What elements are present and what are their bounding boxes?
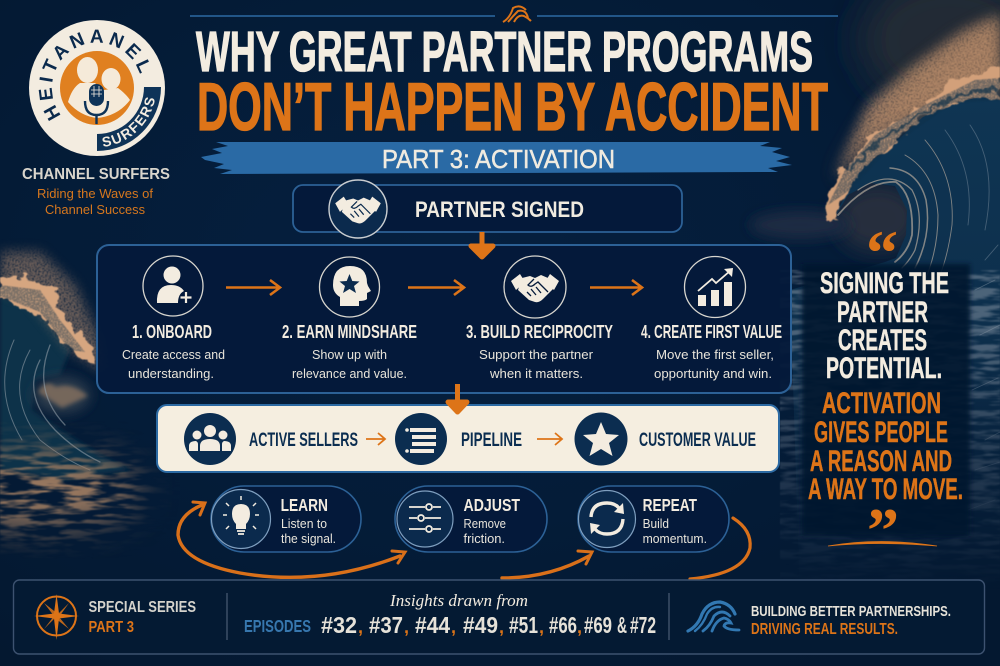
episode numbers: #44 <box>415 612 450 638</box>
step 2: earn mindshare: relevance and value. <box>292 366 407 381</box>
episode numbers: #32 <box>321 612 357 638</box>
footer bar <box>14 580 984 654</box>
step 2: earn mindshare: Show up with <box>312 347 387 362</box>
icon: handshake <box>335 197 381 223</box>
pill: repeat <box>578 486 729 552</box>
logo: channel surfers badge: SURFERS <box>102 98 154 146</box>
tagline: BUILDING BETTER PARTNERSHIPS. <box>751 604 951 620</box>
icon: small orange wave <box>503 6 531 22</box>
step 4: create first value: 4. CREATE FIRST VALUE <box>641 322 782 342</box>
quote underline flourish <box>828 542 937 546</box>
quote panel backing and text <box>802 217 970 566</box>
step 2: earn mindshare <box>282 257 417 381</box>
step 3: build reciprocity: Support the partner <box>479 347 594 362</box>
arrow: repeat loop return <box>690 518 750 579</box>
episode numbers: #51 <box>509 612 538 638</box>
logo caption: Channel Success <box>45 203 145 217</box>
panel: four activation steps <box>97 245 791 393</box>
arrow: adjust loop to repeat <box>502 551 592 578</box>
icon: sliders <box>409 504 441 532</box>
subtitle banner: part 3 activation <box>201 142 792 174</box>
icon: light bulb <box>223 496 259 534</box>
step 4: create first value <box>641 256 782 381</box>
icon: microphone <box>85 84 108 124</box>
arrow: pipeline to value <box>537 433 562 445</box>
pill: learn: the signal. <box>281 532 336 546</box>
step 4: create first value: opportunity and win. <box>654 366 772 381</box>
box: partner signed <box>293 180 682 238</box>
episode numbers: , <box>499 617 504 637</box>
step 3: build reciprocity <box>466 256 613 381</box>
episode numbers: , <box>358 617 363 637</box>
pill: learn: Listen to <box>281 517 327 531</box>
series label: SPECIAL SERIES <box>88 599 196 616</box>
series label: PART 3 <box>88 619 134 636</box>
arrow: steps to outcomes <box>448 384 467 412</box>
pill: adjust <box>395 486 547 552</box>
card: outcomes: CUSTOMER VALUE <box>639 429 756 451</box>
card: outcomes: PIPELINE <box>461 429 522 451</box>
icon: compass <box>34 594 79 640</box>
pill: repeat: momentum. <box>643 532 707 546</box>
step 1: onboard: Create access and <box>122 347 225 362</box>
step 2: earn mindshare: 2. EARN MINDSHARE <box>282 322 417 342</box>
episode numbers: #69 <box>584 612 612 638</box>
quote statement orange: ACTIVATION <box>822 387 941 420</box>
wave: left breaking wave <box>0 252 140 528</box>
arc lettering <box>52 43 140 115</box>
icon: repeat arrows <box>590 503 624 534</box>
step 1: onboard <box>122 256 225 381</box>
pill: adjust: ADJUST <box>464 495 520 515</box>
step 1: onboard: understanding. <box>128 366 214 381</box>
quote statement white <box>820 267 949 385</box>
wave: right crashing wave <box>750 0 1000 600</box>
series label <box>88 599 196 636</box>
subtitle banner: part 3 activation: PART 3: ACTIVATION <box>382 144 615 174</box>
logo: channel surfers badge <box>29 20 165 156</box>
step 3: build reciprocity: 3. BUILD RECIPROCITY <box>466 322 613 342</box>
logo caption <box>22 166 170 217</box>
top rule with wave emblem <box>190 6 838 22</box>
icon: pipeline <box>395 413 447 465</box>
step 3: build reciprocity: when it matters. <box>489 366 583 381</box>
pill: repeat: Build <box>643 517 669 531</box>
arrow: step 2 to 3 <box>408 280 464 295</box>
step 1: onboard: 1. ONBOARD <box>132 322 212 342</box>
step 4: create first value: Move the first seller, <box>656 347 774 362</box>
logo caption: Riding the Waves of <box>37 187 154 201</box>
episode numbers: , <box>451 617 456 637</box>
episode numbers: #66 <box>549 612 577 638</box>
arrow: partner signed to steps <box>471 232 493 257</box>
episode numbers: , <box>404 617 409 637</box>
pill: learn <box>211 486 361 552</box>
insights script line: Insights drawn from <box>389 591 528 610</box>
pill: repeat: REPEAT <box>643 495 697 515</box>
icon: blue wave <box>688 602 739 631</box>
tagline <box>751 604 951 638</box>
episode numbers: #72 <box>630 612 656 638</box>
title <box>196 20 828 145</box>
episode numbers: #49 <box>463 612 498 638</box>
logo: channel surfers badge: HEITANANEL <box>38 30 149 121</box>
episode numbers: & <box>617 612 627 638</box>
logo caption: CHANNEL SURFERS <box>22 166 170 183</box>
quote statement white: CREATES <box>838 324 927 357</box>
quote statement white: PARTNER <box>837 296 928 329</box>
pill: learn: LEARN <box>281 495 328 515</box>
quote statement orange <box>808 387 963 506</box>
episode numbers: EPISODES <box>244 616 311 636</box>
pill: adjust: friction. <box>464 532 505 546</box>
episode numbers: , <box>577 617 582 637</box>
box: partner signed: PARTNER SIGNED <box>415 197 584 222</box>
card: outcomes: ACTIVE SELLERS <box>249 429 358 451</box>
arrow: step 1 to 2 <box>226 280 280 295</box>
surfers ribbon <box>97 87 161 151</box>
card: outcomes <box>157 405 779 472</box>
icon: active sellers <box>184 413 236 465</box>
tagline: DRIVING REAL RESULTS. <box>751 621 898 638</box>
icon: closing quote mark: ” <box>867 495 899 566</box>
icon: customer value star <box>574 412 628 466</box>
episode numbers <box>244 612 656 638</box>
episode numbers: , <box>539 617 544 637</box>
episode numbers: #37 <box>369 612 403 638</box>
silhouettes <box>68 57 130 118</box>
quote statement white: POTENTIAL. <box>826 352 942 385</box>
arrow: sellers to pipeline <box>366 433 385 445</box>
pill: adjust: Remove <box>464 517 506 531</box>
icon: opening quote mark: “ <box>866 217 898 288</box>
arrow: step 3 to 4 <box>590 280 642 295</box>
arrow: learn loop to adjust <box>178 502 405 577</box>
